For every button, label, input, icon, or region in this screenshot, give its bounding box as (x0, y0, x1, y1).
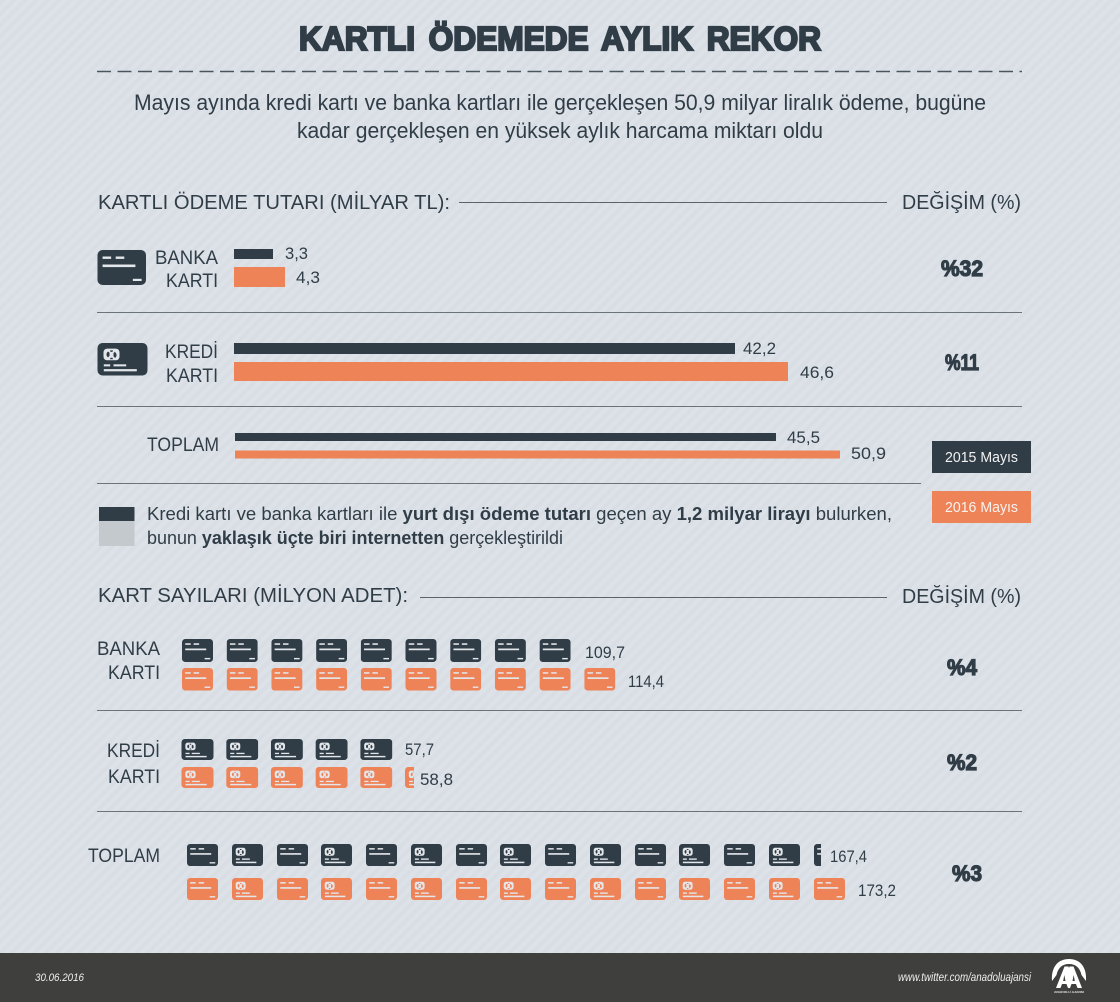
section heading: payment amount (98, 191, 1021, 214)
values: total (787, 428, 886, 463)
values: bank card: 4,3 (296, 268, 320, 287)
change: credit card: %11 (945, 350, 979, 375)
row: bank card amount (98, 244, 983, 292)
values: bank count: 114,4 (628, 672, 664, 691)
section heading: card counts: DEĞİŞİM (%) (902, 585, 1021, 608)
label: bank card: KARTI (166, 271, 218, 292)
change: bank count: %4 (947, 655, 978, 680)
legend: 2016 (932, 491, 1031, 523)
section heading: card counts: KART SAYILARI (MİLYON ADET): (98, 584, 408, 607)
values: bank count: 109,7 (585, 643, 625, 662)
footer (0, 953, 1120, 1002)
legend: 2016: 2016 Mayıs (945, 500, 1018, 516)
row: credit card amount (98, 339, 979, 387)
values: credit card: 42,2 (743, 339, 776, 358)
label: total count: TOPLAM (88, 846, 160, 867)
label: credit count: KARTI (108, 767, 160, 788)
pictogram: bank 2016 (182, 668, 615, 690)
values: credit card: 46,6 (800, 363, 834, 382)
section heading: card counts (98, 584, 1021, 608)
row: bank card count (97, 639, 978, 691)
change: credit count: %2 (947, 750, 977, 775)
values: bank count (585, 643, 664, 691)
values: bank card (285, 244, 320, 287)
change: bank card: %32 (941, 256, 983, 281)
label: credit count: KREDİ (107, 741, 160, 762)
values: credit count: 58,8 (420, 770, 453, 789)
source url: www.twitter.com/anadoluajansi (898, 972, 1031, 984)
values: total count (830, 847, 896, 900)
legend: 2015: 2015 Mayıs (945, 450, 1018, 466)
values: credit card (743, 339, 834, 382)
logo: ANADOLU AJANSI (1054, 990, 1084, 994)
subtitle: kadar gerçekleşen en yüksek aylık harcama miktarı oldu (297, 118, 823, 143)
icon: bank card (98, 250, 146, 285)
logo (1052, 959, 1086, 994)
label: total: TOPLAM (147, 435, 219, 456)
date: 30.06.2016 (35, 972, 85, 984)
label: credit count (107, 741, 160, 788)
row: total count (88, 844, 982, 900)
section heading: payment amount: KARTLI ÖDEME TUTARI (MİLYAR TL): (98, 191, 450, 214)
row: total amount (147, 428, 886, 463)
icon: share square (99, 507, 134, 546)
label: credit card: KARTI (166, 366, 218, 387)
note text: bunun yaklaşık üçte biri internetten gerçekleştirildi (147, 528, 563, 548)
values: credit count (405, 740, 453, 789)
pictogram: total 2016 (187, 878, 845, 900)
bars: total (235, 433, 840, 458)
icon: credit card (98, 343, 148, 376)
legend: 2015 (932, 441, 1031, 473)
label: credit card (165, 342, 218, 387)
pictogram: bank 2015 (182, 639, 571, 662)
section heading: payment amount: DEĞİŞİM (%) (902, 191, 1021, 214)
label: bank card: BANKA (155, 248, 218, 269)
values: total count: 167,4 (830, 847, 867, 866)
pictogram: total 2015 (187, 844, 845, 866)
label: credit card: KREDİ (165, 342, 218, 363)
change: total count: %3 (952, 861, 982, 886)
label: bank card count: BANKA (97, 639, 160, 660)
bars: credit card (234, 343, 788, 381)
values: total count: 173,2 (858, 881, 896, 900)
label: bank card (155, 248, 218, 292)
row: credit card count (107, 739, 977, 789)
values: bank card: 3,3 (285, 244, 308, 263)
subtitle: Mayıs ayında kredi kartı ve banka kartları ile gerçekleşen 50,9 milyar liralık ödeme, bugüne (134, 90, 986, 115)
subtitle (134, 90, 986, 143)
label: bank card count: KARTI (108, 663, 160, 684)
note text (147, 504, 892, 548)
pictogram: credit 2016 (182, 767, 437, 788)
note text: Kredi kartı ve banka kartları ile yurt dışı ödeme tutarı geçen ay 1,2 milyar lirayı bulurken, (147, 504, 892, 524)
values: total: 50,9 (851, 444, 886, 463)
values: credit count: 57,7 (405, 740, 434, 759)
label: bank card count (97, 639, 160, 684)
bars: bank card (234, 249, 285, 287)
note (99, 504, 892, 548)
title: KARTLI ÖDEMEDE AYLIK REKOR (299, 20, 821, 57)
pictogram: credit 2015 (182, 739, 392, 760)
values: total: 45,5 (787, 428, 820, 447)
